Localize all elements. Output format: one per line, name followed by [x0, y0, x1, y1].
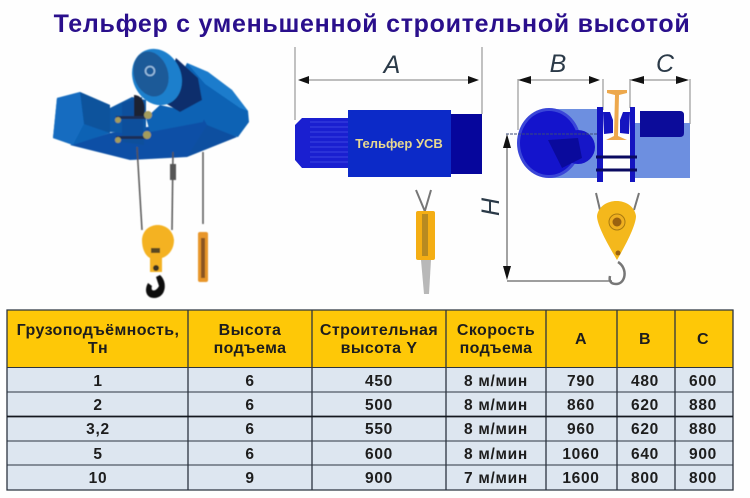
- row 4: 5: [93, 446, 103, 463]
- row 4: 600: [365, 446, 393, 463]
- row 2: [93, 397, 717, 414]
- diagram: side view with dimension A: [295, 47, 482, 294]
- table header: подъема: [460, 340, 532, 357]
- row 5: 10: [89, 470, 107, 487]
- table rows: [7, 367, 733, 490]
- label: product name: Тельфер УСВ: [355, 136, 443, 151]
- icon: yellow hook block: [142, 225, 174, 298]
- table header: A: [575, 331, 587, 348]
- row 5: [89, 470, 717, 487]
- row 3: 620: [631, 421, 659, 438]
- row 1: [93, 373, 717, 390]
- table header: [7, 310, 733, 367]
- illustration: blue electric hoist: [53, 41, 249, 298]
- row 1: 480: [631, 373, 659, 390]
- row 2: 860: [567, 397, 595, 414]
- row 5: 7 м/мин: [464, 470, 528, 487]
- row 4: 640: [631, 446, 659, 463]
- row 1: 450: [365, 373, 393, 390]
- label: A: A: [382, 51, 400, 79]
- icon: pendant control: [198, 232, 208, 282]
- row 4: 1060: [562, 446, 600, 463]
- row 4: [93, 446, 717, 463]
- table header: Грузоподъёмность,: [17, 322, 179, 339]
- row 3: 550: [365, 421, 393, 438]
- row 1: 600: [689, 373, 717, 390]
- title: Тельфер с уменьшенной строительной высотой: [54, 10, 690, 38]
- row 3: 960: [567, 421, 595, 438]
- table header: подъема: [214, 340, 286, 357]
- table header: B: [639, 331, 651, 348]
- table header: Строительная: [320, 322, 438, 339]
- table header: Скорость: [457, 322, 535, 339]
- row 3: 3,2: [86, 421, 110, 438]
- table header: высота Y: [341, 340, 417, 357]
- row 4: 6: [245, 446, 255, 463]
- row 3: [86, 421, 717, 438]
- row 5: 9: [245, 470, 255, 487]
- table header: C: [697, 331, 709, 348]
- row 1: 6: [245, 373, 255, 390]
- row 1: 790: [567, 373, 595, 390]
- row 1: 1: [93, 373, 103, 390]
- row 2: 2: [93, 397, 103, 414]
- row 4: 8 м/мин: [464, 446, 528, 463]
- row 2: 8 м/мин: [464, 397, 528, 414]
- specifications table: [7, 310, 733, 490]
- table header: Высота: [219, 322, 281, 339]
- row 3: 8 м/мин: [464, 421, 528, 438]
- row 1: 8 м/мин: [464, 373, 528, 390]
- icon: hook front view: [596, 193, 639, 284]
- table header: Тн: [88, 340, 108, 357]
- row 2: 880: [689, 397, 717, 414]
- row 3: 6: [245, 421, 255, 438]
- icon: hook side view: [416, 190, 435, 294]
- label: H: H: [477, 197, 505, 216]
- label: C: C: [656, 50, 675, 78]
- label: B: B: [550, 50, 566, 78]
- row 5: 800: [689, 470, 717, 487]
- row 4: 900: [689, 446, 717, 463]
- row 5: 800: [631, 470, 659, 487]
- row 5: 1600: [562, 470, 600, 487]
- row 2: 620: [631, 397, 659, 414]
- row 3: 880: [689, 421, 717, 438]
- row 2: 500: [365, 397, 393, 414]
- diagram: front view with dimensions B, C, H: [477, 50, 690, 284]
- row 2: 6: [245, 397, 255, 414]
- row 5: 900: [365, 470, 393, 487]
